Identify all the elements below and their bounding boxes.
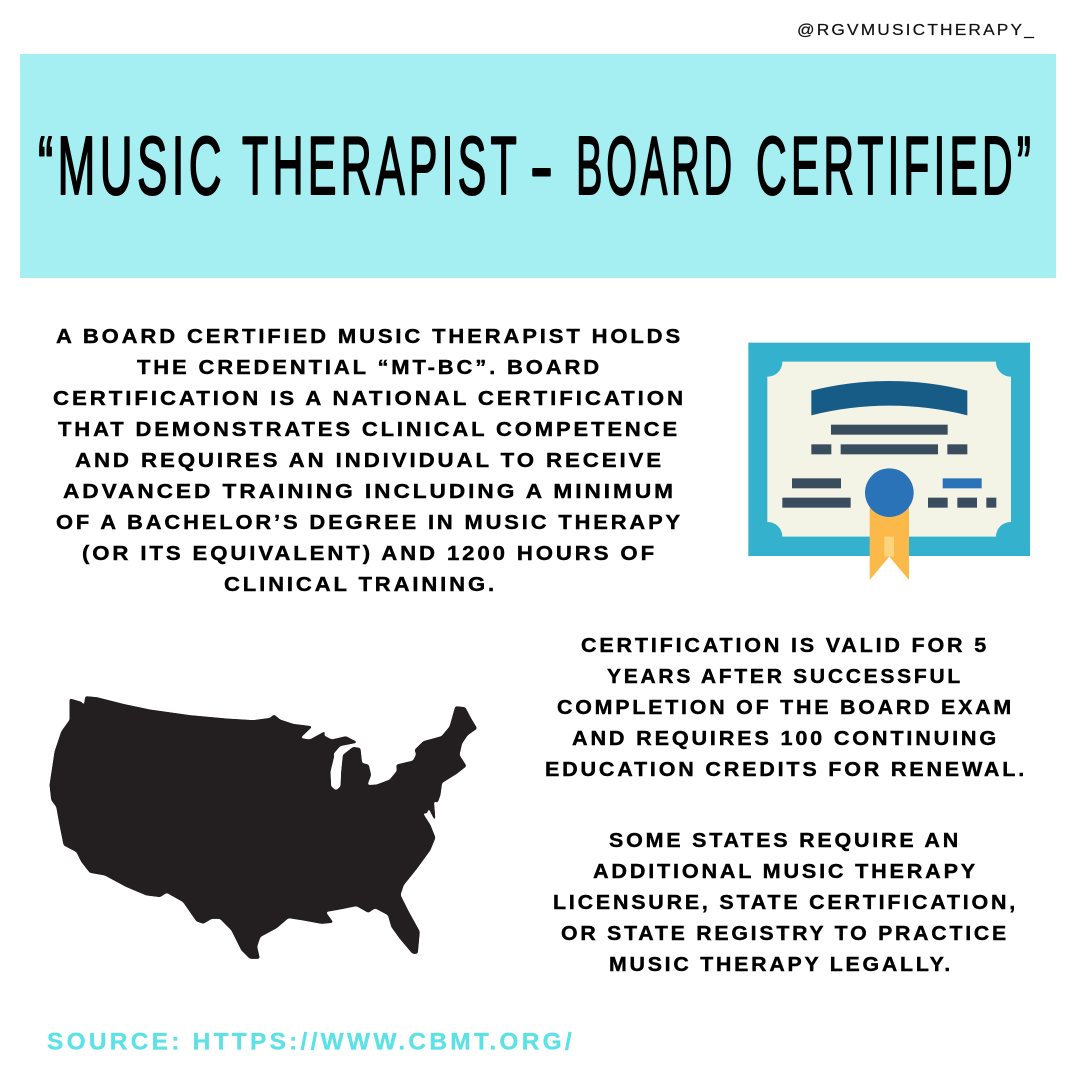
title [38,119,1035,212]
text block: state requirements [553,830,1018,976]
text block: state requirements: OR STATE REGISTRY TO PRACTICE [561,923,1009,945]
text block: state requirements: LICENSURE, STATE CERTIFICATION, [553,892,1018,914]
title: BOARD [576,119,736,212]
source link: SOURCE: HTTPS://WWW.CBMT.ORG/ [47,1028,575,1056]
text block: board certification: THE CREDENTIAL “MT-BC”. BOARD [137,357,602,379]
certificate blue line [943,478,982,488]
text block: board certification: (OR ITS EQUIVALENT) AND 1200 HOURS OF [82,543,657,565]
text block: board certification: CERTIFICATION IS A NATIONAL CERTIFICATION [53,388,686,410]
map: United States silhouette [50,697,477,958]
title: “MUSIC [38,119,226,212]
icon: certificate [748,343,1030,580]
text block: state requirements: SOME STATES REQUIRE AN [609,830,961,852]
title banner [20,54,1056,278]
banner background [20,54,1056,278]
text block: board certification: ADVANCED TRAINING INCLUDING A MINIMUM [63,481,676,503]
title: THERAPIST [242,119,521,212]
text block: board certification: CLINICAL TRAINING. [224,574,497,596]
text block: board certification: AND REQUIRES AN INDIVIDUAL TO RECEIVE [75,450,664,472]
certificate text lines [782,425,996,508]
title: - [530,119,553,212]
text block: certification validity [545,635,1027,781]
text block: state requirements: ADDITIONAL MUSIC THERAPY [593,861,978,883]
text block: certification validity: COMPLETION OF THE BOARD EXAM [557,697,1014,719]
certificate frame [748,343,1030,556]
seal [865,468,914,517]
social handle: @RGVMUSICTHERAPY_ [797,22,1036,39]
text block: board certification: THAT DEMONSTRATES CLINICAL COMPETENCE [58,419,680,441]
text block: certification validity: EDUCATION CREDITS FOR RENEWAL. [545,759,1027,781]
certificate paper [767,362,1011,537]
text block: board certification [53,326,686,596]
text block: certification validity: AND REQUIRES 100 CONTINUING [572,728,999,750]
text block: board certification: OF A BACHELOR’S DEGREE IN MUSIC THERAPY [56,512,683,534]
ribbon highlight [884,537,894,557]
text block: certification validity: CERTIFICATION IS VALID FOR 5 [581,635,989,657]
text block: state requirements: MUSIC THERAPY LEGALLY. [609,954,953,976]
text block: board certification: A BOARD CERTIFIED MUSIC THERAPIST HOLDS [56,326,683,348]
ribbon [870,503,909,580]
certificate heading banner [811,381,967,415]
text block: certification validity: YEARS AFTER SUCCESSFUL [607,666,963,688]
